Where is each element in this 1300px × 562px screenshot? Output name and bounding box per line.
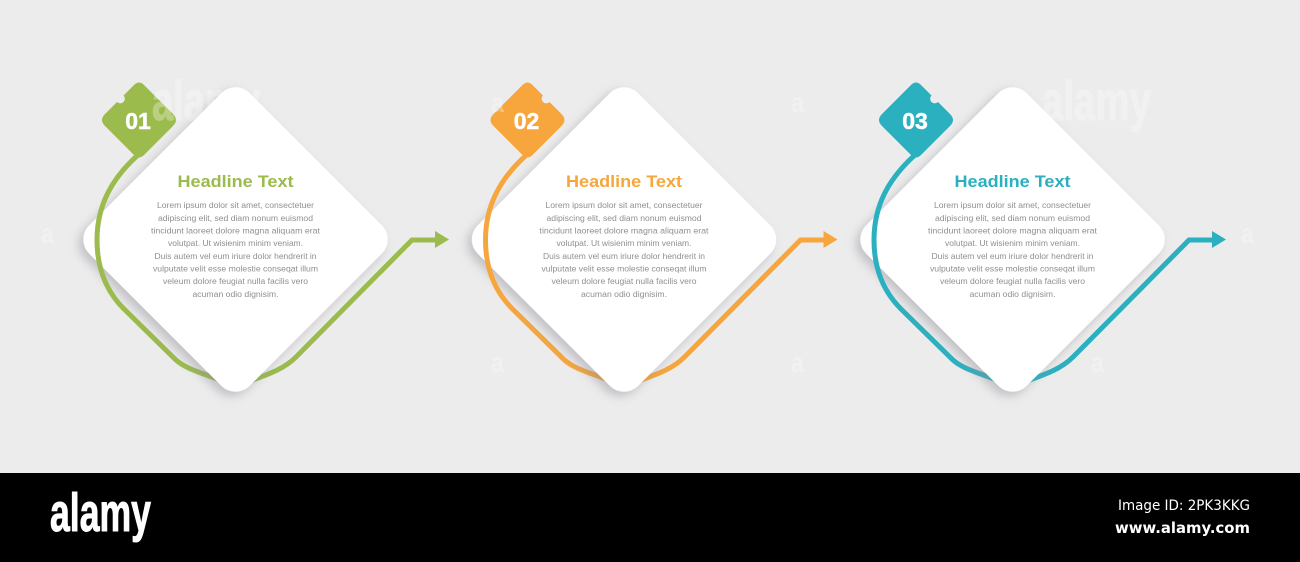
body text: volutpat. Ut wisienim minim veniam. [168,238,303,248]
panel: step 01 [75,79,449,400]
watermarks: alamy [152,69,260,132]
body text: acuman odio dignisim. [581,289,667,299]
body text: acuman odio dignisim. [970,289,1056,299]
body text: veleum dolore feugiat nulla facilis vero [552,276,697,286]
body text: tincidunt laoreet dolore magna aliquam erat [540,226,709,236]
headline: Headline Text [954,173,1071,191]
body text: veleum dolore feugiat nulla facilis vero [163,276,308,286]
headline: Headline Text [566,173,683,191]
body text: veleum dolore feugiat nulla facilis vero [940,276,1085,286]
watermarks: a [491,347,504,378]
alamy logo: alamy [50,483,151,543]
body text: vulputate velit esse molestie conseqat illum [153,264,318,274]
watermarks: a [491,87,504,118]
body text: Lorem ipsum dolor sit amet, consectetuer [546,200,703,210]
number badge: 03 [902,108,928,134]
watermarks [41,69,1254,378]
panel: step 02 [463,79,838,400]
watermarks: a [41,218,54,249]
image id: Image ID: 2PK3KKG [1118,498,1250,514]
white diamond card [463,79,785,400]
body text: Duis autem vel eum iriure dolor hendrerit in [543,251,705,261]
watermarks: a [791,87,804,118]
body text: vulputate velit esse molestie conseqat illum [542,264,706,274]
body text: adipiscing elit, sed diam nonum euismod [935,213,1090,223]
body text: vulputate velit esse molestie conseqat illum [930,264,1095,274]
number badge: 01 [125,108,151,134]
body text: volutpat. Ut wisienim minim veniam. [556,238,692,248]
connector arrow: step 01 [123,231,449,381]
connector arrow: step 02 [512,231,838,381]
body text: Duis autem vel eum iriure dolor hendrerit in [932,251,1094,261]
body text: adipiscing elit, sed diam nonum euismod [158,213,313,223]
body text: Lorem ipsum dolor sit amet, consectetuer [934,200,1091,210]
body text: Lorem ipsum dolor sit amet, consectetuer [157,200,314,210]
watermarks: alamy [1042,69,1151,132]
watermarks: a [1091,347,1104,378]
number badge [879,82,953,158]
body text [151,200,321,299]
body text [928,200,1098,299]
number badge [102,82,176,158]
body text: tincidunt laoreet dolore magna aliquam erat [151,226,321,236]
connector curve: step 03 [874,154,916,309]
number badge [490,82,564,158]
connector arrow: step 03 [900,231,1226,381]
white diamond card [75,79,396,400]
headline: Headline Text [178,173,294,191]
website: www.alamy.com [1115,519,1250,537]
body text: Duis autem vel eum iriure dolor hendrerit in [154,251,317,261]
watermarks: a [791,347,804,378]
body text [540,200,709,299]
white diamond card [852,79,1173,400]
body text: tincidunt laoreet dolore magna aliquam erat [928,226,1098,236]
connector curve: step 02 [486,154,528,309]
body text: acuman odio dignisim. [192,289,278,299]
number badge: 02 [514,108,539,134]
connector curve: step 01 [97,154,139,309]
body text: adipiscing elit, sed diam nonum euismod [546,213,702,223]
panel: step 03 [852,79,1226,400]
body text: volutpat. Ut wisienim minim veniam. [945,238,1080,248]
watermarks: a [1241,218,1254,249]
footer bar [0,473,1300,562]
